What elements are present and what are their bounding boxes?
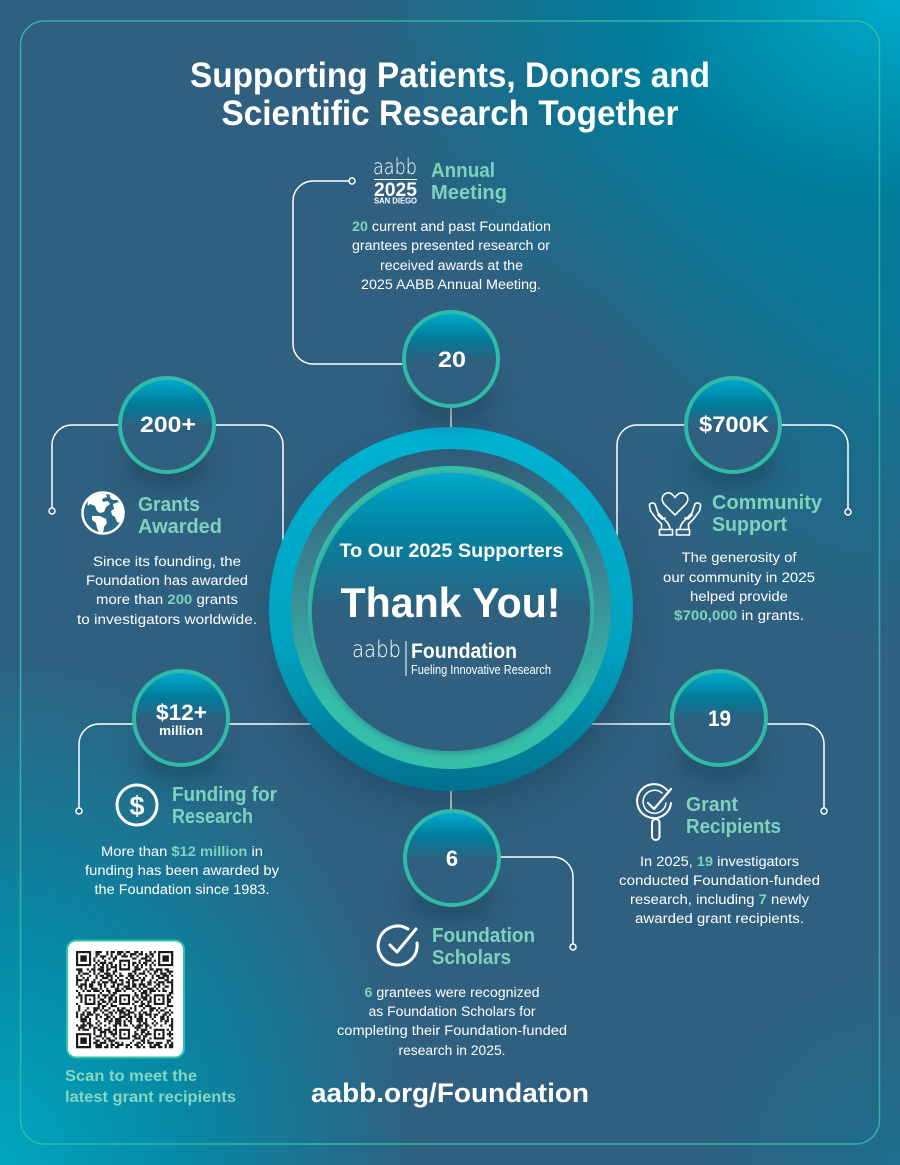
badge headline: Thank You! — [340, 579, 560, 626]
foundation logo — [352, 637, 551, 677]
body text: research in 2025. — [398, 1043, 506, 1058]
icon: hands holding heart — [649, 493, 701, 535]
body text — [77, 554, 257, 627]
QR caption: Scan to meet the — [65, 1068, 197, 1085]
body text — [85, 844, 279, 897]
body text — [337, 985, 567, 1058]
body text: grantees presented research or — [352, 238, 551, 253]
icon: dollar coin: $ — [129, 791, 145, 821]
body text: to investigators worldwide. — [77, 612, 257, 627]
heading: Grant — [686, 794, 738, 816]
body text: the Foundation since 1983. — [94, 882, 270, 897]
stat bubble: 6 — [405, 811, 499, 921]
icon: AABB 2025 San Diego logo: aabb — [373, 155, 417, 179]
heading: Scholars — [432, 947, 511, 969]
stat bubble: 19: 19 — [708, 706, 731, 731]
body text — [619, 854, 820, 926]
connector: grant recipients — [580, 724, 827, 814]
icon: dollar coin — [117, 785, 157, 825]
outer ring — [269, 427, 633, 791]
connector stubs to centre — [450, 405, 452, 812]
heading: Annual — [431, 160, 495, 182]
QR code — [67, 940, 184, 1058]
heading: Awarded — [138, 516, 222, 538]
connector: grants awarded — [49, 425, 283, 545]
body text — [663, 550, 815, 623]
body text: helped provide — [690, 589, 788, 604]
title — [190, 56, 710, 133]
website URL: aabb.org/Foundation — [311, 1078, 589, 1108]
icon: globe — [82, 492, 124, 534]
heading: Grants — [138, 494, 200, 516]
stat bubble: 20: 20 — [438, 347, 466, 372]
teal inner rim — [308, 466, 594, 752]
body text: Since its founding, the — [93, 554, 241, 569]
QR finder and alignment patterns — [76, 951, 173, 1048]
body text: The generosity of — [682, 550, 797, 565]
body text: more than 200 grants — [96, 592, 238, 607]
stat bubble: 19 — [672, 671, 766, 781]
heading: Meeting — [431, 182, 507, 204]
icon: AABB 2025 San Diego logo — [373, 155, 417, 206]
foundation logo: aabb — [352, 637, 401, 663]
stat bubble: 6: 6 — [446, 846, 458, 871]
heading: Research — [172, 806, 253, 828]
stat bubble: $12+ million: $12+ — [156, 700, 207, 725]
body text — [352, 219, 551, 292]
stat bubble: $12+ million — [134, 671, 228, 781]
connector: annual meeting — [293, 178, 405, 364]
QR caption: latest grant recipients — [65, 1089, 236, 1106]
heading: Foundation — [432, 925, 535, 947]
connector: community support — [617, 425, 851, 545]
body text: awarded grant recipients. — [635, 911, 804, 926]
title: Scientific Research Together — [222, 94, 679, 133]
icon: AABB 2025 San Diego logo: 2025 — [374, 179, 417, 201]
body text: completing their Foundation-funded — [337, 1023, 567, 1038]
stat bubble: $700K: $700K — [699, 412, 769, 437]
icon: circled check — [378, 926, 417, 965]
body text: 20 current and past Foundation — [352, 219, 551, 234]
panel: grants awarded — [77, 492, 257, 627]
body text: Foundation has awarded — [86, 573, 248, 588]
body text: our community in 2025 — [663, 570, 815, 585]
inner disc — [312, 473, 590, 751]
stat bubble: $12+ million: million — [159, 723, 203, 738]
middle ring — [291, 449, 611, 769]
connector: funding — [76, 724, 320, 814]
heading: Recipients — [686, 816, 781, 838]
panel: funding for research — [85, 784, 279, 897]
icon: magnifier with check — [637, 784, 671, 840]
title: Supporting Patients, Donors and — [190, 56, 710, 95]
panel: foundation scholars — [337, 925, 567, 1058]
panel: grant recipients — [619, 784, 820, 926]
body text: as Foundation Scholars for — [368, 1004, 536, 1019]
stat bubble: $700K — [686, 378, 780, 488]
body text: conducted Foundation-funded — [619, 873, 820, 888]
badge subtitle: To Our 2025 Supporters — [340, 541, 564, 562]
stat bubble: 200+: 200+ — [140, 412, 196, 437]
connector: foundation scholars — [497, 857, 576, 950]
body text: More than $12 million in — [101, 844, 263, 859]
body text: received awards at the — [380, 258, 523, 273]
heading: Community — [712, 492, 823, 514]
body text: funding has been awarded by — [85, 863, 279, 878]
foundation logo: Foundation — [411, 640, 517, 663]
body text: In 2025, 19 investigators — [640, 854, 799, 869]
body text: $700,000 in grants. — [674, 608, 804, 623]
panel: community support — [649, 492, 823, 623]
central thank you badge — [269, 427, 633, 808]
heading: Support — [712, 514, 787, 536]
panel: annual meeting — [352, 155, 551, 292]
heading: Funding for — [172, 784, 277, 806]
stat bubble: 20 — [404, 312, 498, 422]
icon: AABB 2025 San Diego logo: SAN DIEGO — [374, 196, 417, 206]
foundation logo: Fueling Innovative Research — [411, 663, 551, 677]
body text: 6 grantees were recognized — [364, 985, 540, 1000]
stat bubble: 200+ — [120, 378, 214, 488]
body text: 2025 AABB Annual Meeting. — [361, 277, 541, 292]
body text: research, including 7 newly — [630, 892, 809, 907]
